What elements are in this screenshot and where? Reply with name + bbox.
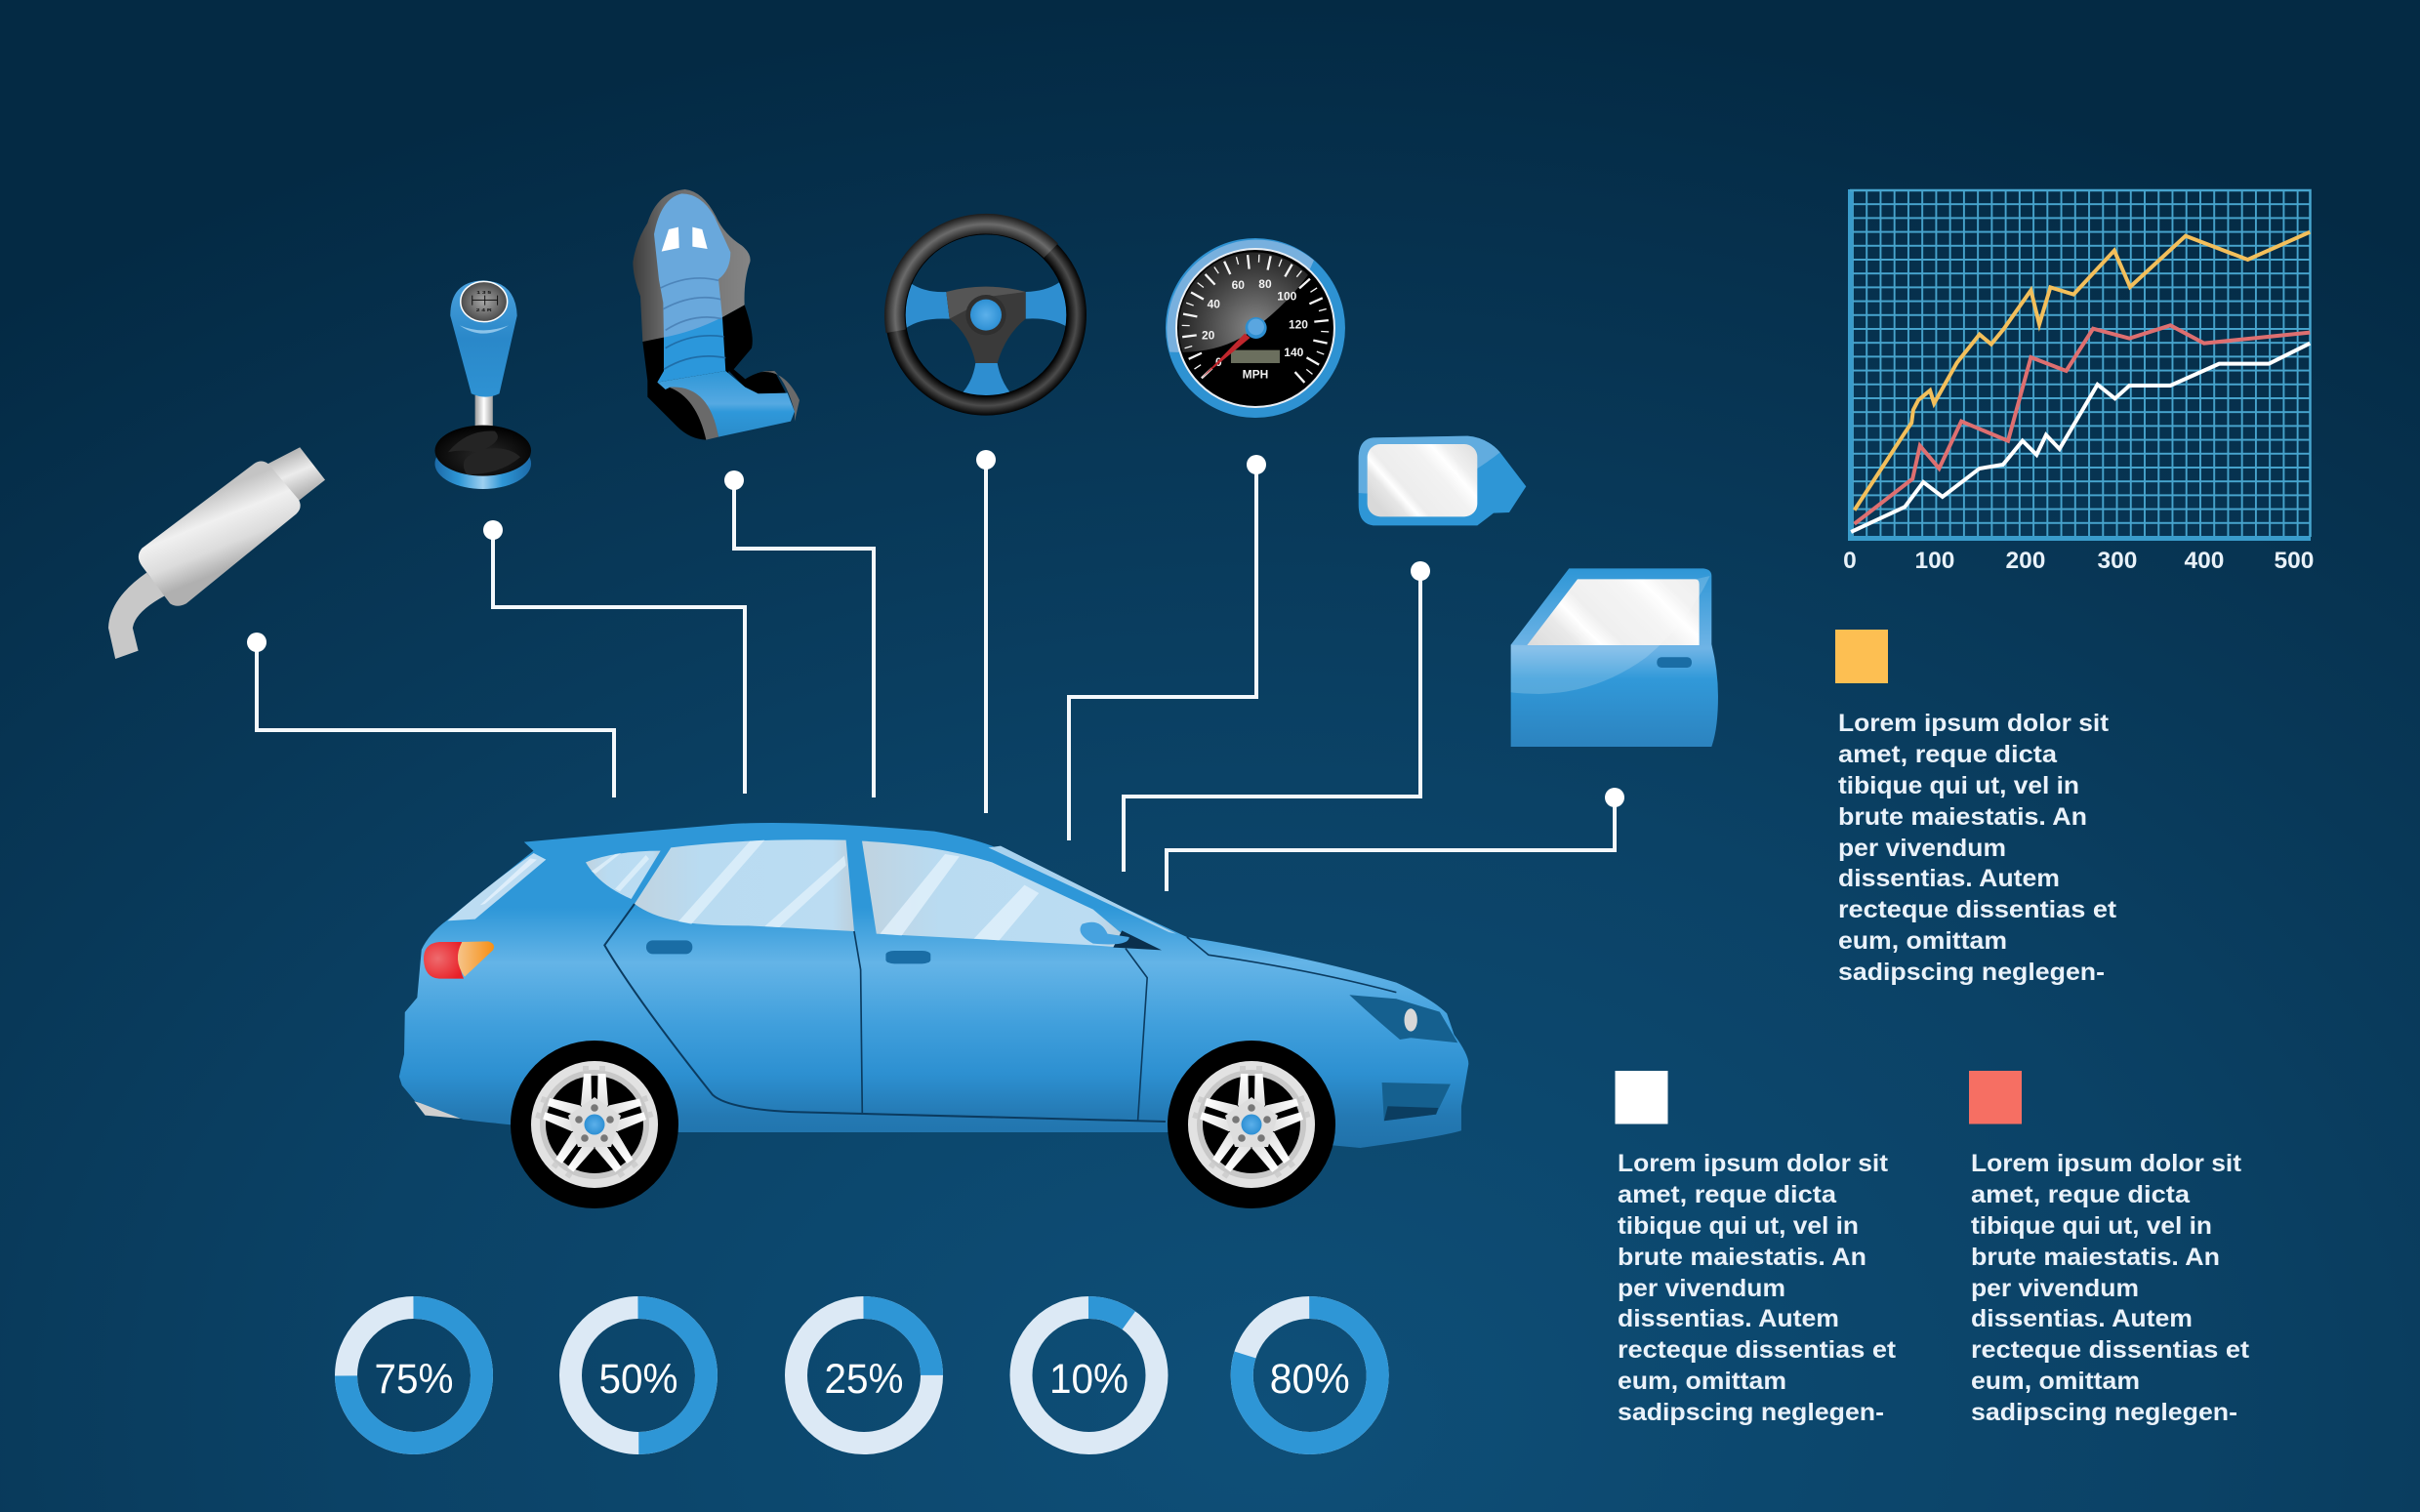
chart axis labels: 0 bbox=[1843, 548, 1857, 574]
text block: red series: eum, omittam bbox=[1971, 1368, 2140, 1395]
donut: 10%: 10% bbox=[1049, 1356, 1128, 1403]
chart lines bbox=[1851, 232, 2310, 532]
legend swatch: white bbox=[1615, 1071, 1667, 1124]
text block: red series: recteque dissentias et bbox=[1971, 1336, 2250, 1364]
text block: yellow series: eum, omittam bbox=[1838, 927, 2007, 955]
text block: white series: per vivendum bbox=[1618, 1275, 1785, 1302]
text block: red series bbox=[1971, 1150, 2250, 1426]
text block: red series: per vivendum bbox=[1971, 1275, 2139, 1302]
text block: white series: recteque dissentias et bbox=[1618, 1336, 1897, 1364]
text block: white series bbox=[1618, 1150, 1897, 1426]
donut: 50%: 50% bbox=[599, 1356, 677, 1403]
car rear details: windows, tail light, door lines bbox=[424, 839, 1166, 1122]
text block: white series: dissentias. Autem bbox=[1618, 1305, 1839, 1332]
line chart bbox=[1843, 189, 2314, 574]
icon: speedometer: 120 bbox=[1289, 318, 1308, 332]
icon: gear shifter: 1 3 5 bbox=[476, 291, 492, 296]
icon: steering wheel bbox=[894, 224, 1077, 405]
front wheel bbox=[1168, 1041, 1335, 1208]
text block: yellow series bbox=[1838, 710, 2117, 986]
donut: 75%: 75% bbox=[375, 1356, 453, 1403]
icon: side mirror bbox=[1359, 436, 1526, 525]
icon: car door bbox=[1511, 568, 1718, 747]
connector: mirror to car bbox=[1124, 561, 1430, 872]
icon: speedometer: 40 bbox=[1208, 298, 1220, 311]
car body bbox=[399, 823, 1468, 1148]
text block: white series: amet, reque dicta bbox=[1618, 1181, 1837, 1208]
chart axis labels: 100 bbox=[1915, 548, 1954, 574]
icon: speedometer: 100 bbox=[1277, 289, 1297, 303]
text block: yellow series: per vivendum bbox=[1838, 835, 2006, 862]
text block: white series: brute maiestatis. An bbox=[1618, 1244, 1866, 1271]
icon: gear shifter bbox=[434, 280, 531, 489]
text block: red series: dissentias. Autem bbox=[1971, 1305, 2193, 1332]
connector: speedometer to car bbox=[1069, 455, 1266, 840]
text block: white series: tibique qui ut, vel in bbox=[1618, 1212, 1859, 1240]
text block: yellow series: recteque dissentias et bbox=[1838, 896, 2117, 923]
icon: gear shifter: 2 4 R bbox=[476, 308, 493, 313]
chart axis labels: 500 bbox=[2275, 548, 2314, 574]
text block: red series: amet, reque dicta bbox=[1971, 1181, 2191, 1208]
chart axis labels: 200 bbox=[2006, 548, 2045, 574]
icon: racing seat bbox=[633, 189, 800, 440]
text block: red series: tibique qui ut, vel in bbox=[1971, 1212, 2212, 1240]
donut: 50% bbox=[570, 1308, 707, 1443]
icon: speedometer bbox=[1166, 238, 1345, 418]
connector: gear shifter to car bbox=[483, 520, 745, 794]
donut: 25%: 25% bbox=[824, 1356, 904, 1403]
donut: 25% bbox=[797, 1308, 931, 1443]
text block: yellow series: Lorem ipsum dolor sit bbox=[1838, 710, 2110, 737]
chart axis labels: 300 bbox=[2098, 548, 2137, 574]
text block: red series: sadipscing neglegen- bbox=[1971, 1399, 2237, 1426]
text block: yellow series: dissentias. Autem bbox=[1838, 865, 2060, 892]
legend swatch: red bbox=[1969, 1071, 2022, 1124]
text block: white series: eum, omittam bbox=[1618, 1368, 1786, 1395]
icon: exhaust muffler bbox=[108, 447, 325, 659]
text block: yellow series: amet, reque dicta bbox=[1838, 741, 2058, 768]
connector: door to car bbox=[1167, 788, 1624, 891]
text block: white series: Lorem ipsum dolor sit bbox=[1618, 1150, 1889, 1177]
donut: 80% bbox=[1242, 1308, 1377, 1443]
connector: seat to car bbox=[724, 470, 874, 797]
donut: 80%: 80% bbox=[1270, 1356, 1350, 1403]
text block: red series: brute maiestatis. An bbox=[1971, 1244, 2220, 1271]
chart grid bbox=[1848, 189, 2311, 541]
icon: speedometer: 20 bbox=[1202, 329, 1215, 343]
icon: speedometer: MPH bbox=[1243, 367, 1268, 381]
connector: exhaust to car bbox=[247, 633, 614, 797]
text block: yellow series: tibique qui ut, vel in bbox=[1838, 772, 2079, 799]
text block: white series: sadipscing neglegen- bbox=[1618, 1399, 1884, 1426]
icon: speedometer: 60 bbox=[1232, 278, 1245, 292]
text block: yellow series: brute maiestatis. An bbox=[1838, 803, 2087, 831]
chart axis labels bbox=[1843, 548, 2314, 574]
chart axis labels: 400 bbox=[2185, 548, 2224, 574]
text block: red series: Lorem ipsum dolor sit bbox=[1971, 1150, 2242, 1177]
icon: speedometer: 0 bbox=[1215, 355, 1222, 369]
donut: 75% bbox=[346, 1308, 482, 1443]
icon: speedometer: 80 bbox=[1258, 277, 1272, 291]
rear wheel bbox=[511, 1041, 678, 1208]
legend swatch: yellow bbox=[1835, 630, 1888, 683]
icon: speedometer: 140 bbox=[1284, 346, 1304, 359]
car illustration bbox=[399, 823, 1468, 1208]
donut: 10% bbox=[1021, 1308, 1157, 1443]
connector: steering wheel to car bbox=[976, 450, 996, 813]
text block: yellow series: sadipscing neglegen- bbox=[1838, 959, 2105, 986]
